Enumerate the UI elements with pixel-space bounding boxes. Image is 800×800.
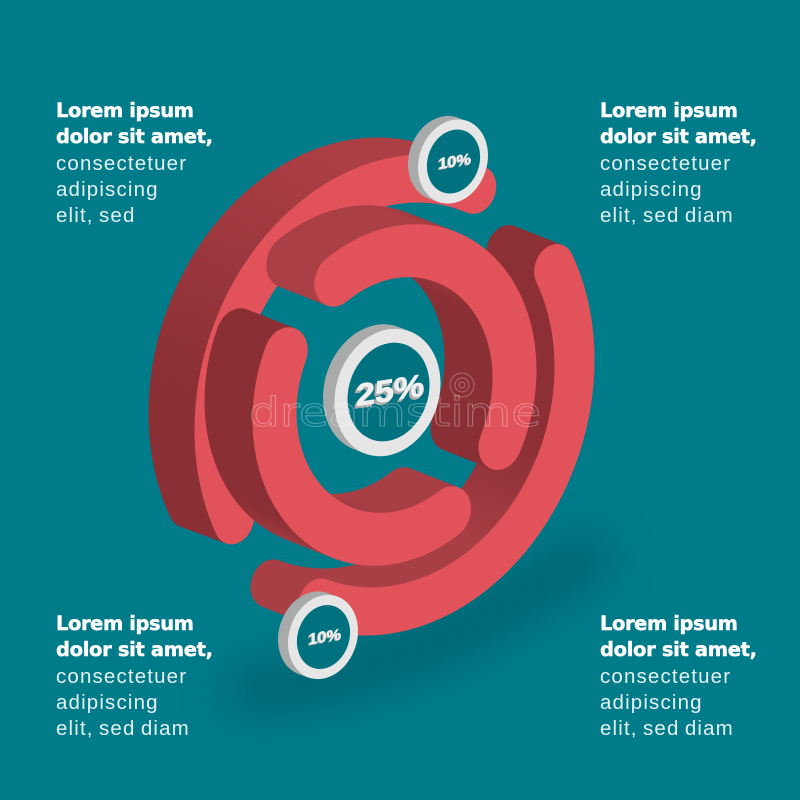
text block: top right: adipiscing <box>600 178 703 201</box>
text block: bottom left: Lorem ipsum <box>56 612 194 635</box>
ring: inner upper-right arc <box>288 212 515 472</box>
medal: top 10% <box>408 110 488 209</box>
text block: top right <box>600 99 757 227</box>
medal: bottom 10%: 10% <box>308 628 340 649</box>
text block: bottom left: adipiscing <box>56 691 159 714</box>
text block: bottom right: dolor sit amet, <box>600 638 757 661</box>
text block: top left: consectetuer <box>56 152 187 175</box>
text block: bottom right: consectetuer <box>600 665 731 688</box>
medal: bottom 10% <box>278 586 358 685</box>
medal: centre 25%: 25% <box>356 367 424 413</box>
text block: bottom left <box>56 612 213 740</box>
text block: top left: Lorem ipsum <box>56 99 194 122</box>
text block: top right: dolor sit amet, <box>600 125 757 148</box>
text block: bottom right: adipiscing <box>600 691 703 714</box>
watermark: dreamstime <box>249 390 541 436</box>
watermark <box>249 373 541 436</box>
ring: inner lower-left arc <box>226 306 449 559</box>
text block: bottom left: elit, sed diam <box>56 717 190 740</box>
text block: bottom right: Lorem ipsum <box>600 612 738 635</box>
medal: bottom 10%: 10% <box>308 627 341 648</box>
text block: bottom left: consectetuer <box>56 665 187 688</box>
medal: top 10%: 10% <box>438 151 471 173</box>
ground shadow <box>245 558 590 690</box>
text block: top right: elit, sed diam <box>600 204 734 227</box>
text block: top left: dolor sit amet, <box>56 125 213 148</box>
text block: top right: consectetuer <box>600 152 731 175</box>
text block: top left <box>56 99 213 227</box>
ring: outer left arc <box>169 149 476 524</box>
text block: bottom left: dolor sit amet, <box>56 638 213 661</box>
medal: centre 25% <box>323 316 440 465</box>
medal: top 10%: 10% <box>438 152 470 174</box>
medal: centre 25%: 25% <box>354 370 422 415</box>
text block: top right: Lorem ipsum <box>600 99 738 122</box>
text block: top left: elit, sed <box>56 204 136 227</box>
text block: bottom right <box>600 612 757 740</box>
ring: outer right arc <box>270 246 575 623</box>
text block: bottom right: elit, sed diam <box>600 717 734 740</box>
text block: top left: adipiscing <box>56 178 159 201</box>
